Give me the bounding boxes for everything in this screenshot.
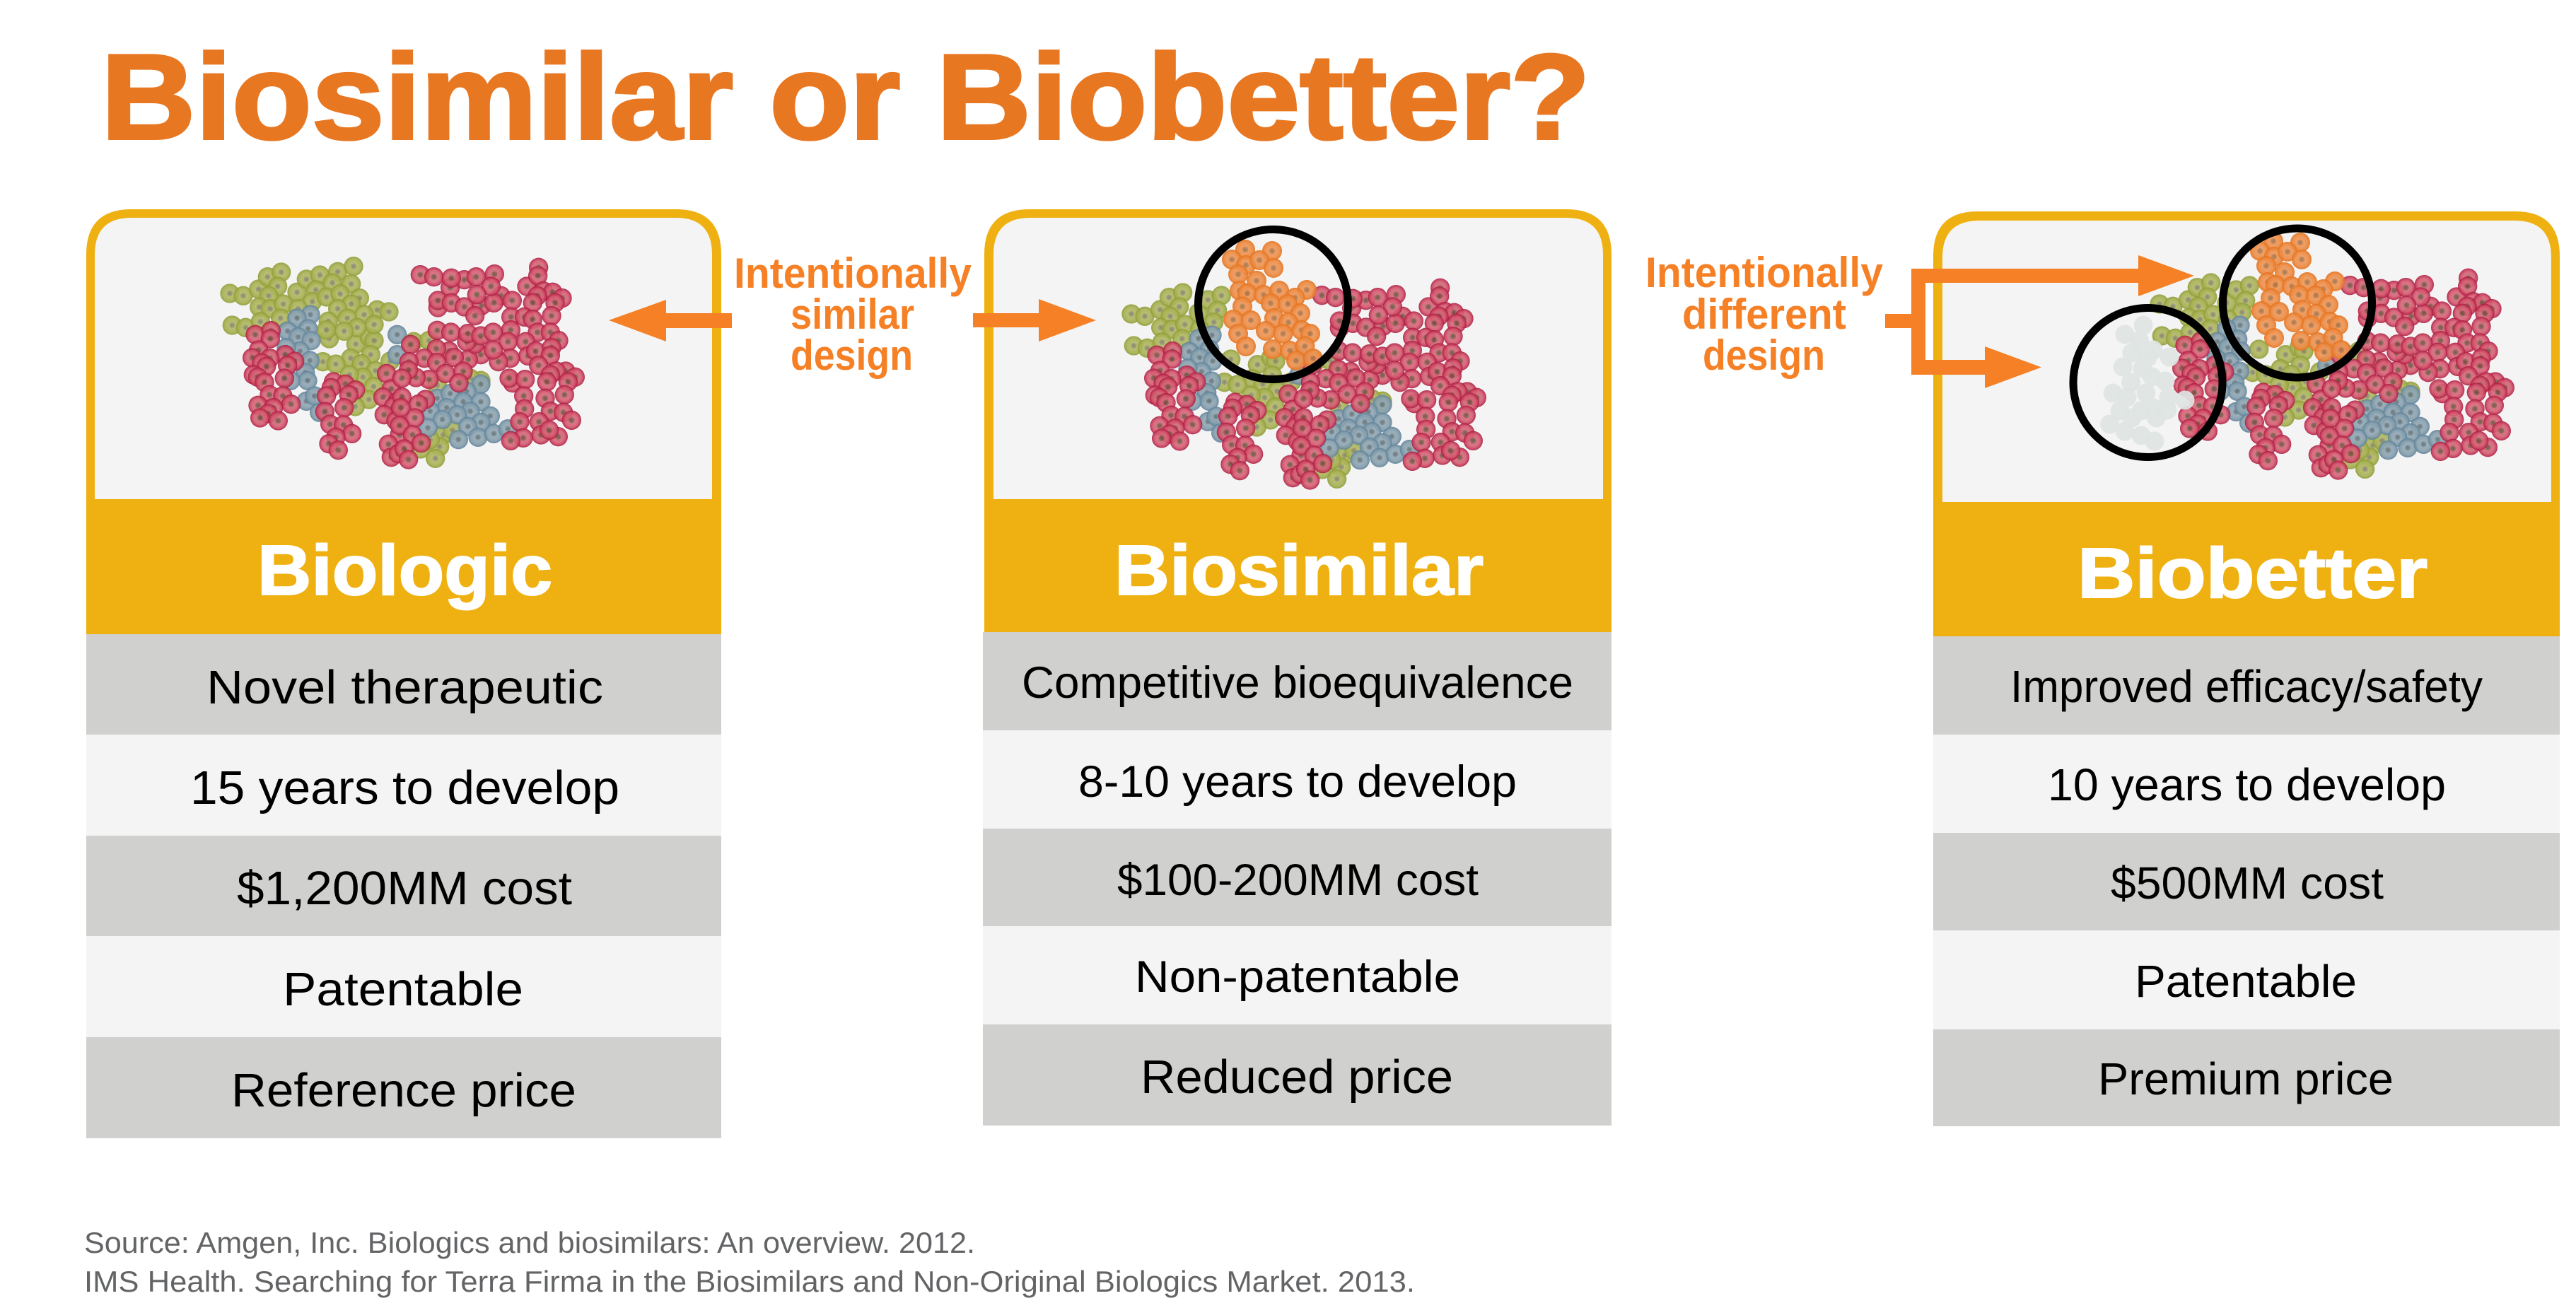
callout: intentionally different design: Intentionally — [1645, 249, 1884, 296]
callout: intentionally different design: design — [1703, 332, 1825, 379]
molecule area — [95, 218, 712, 499]
panel frame — [1933, 211, 2560, 636]
callout: intentionally similar design: design — [791, 332, 913, 379]
row: Competitive bioequivalence: Competitive bioequivalence — [1022, 658, 1573, 708]
row: Non-patentable — [983, 926, 1612, 1024]
heading: Biologic: Biologic — [257, 531, 552, 610]
row: $500MM cost: $500MM cost — [2111, 858, 2384, 908]
row: $100-200MM cost: $100-200MM cost — [1117, 855, 1479, 905]
row: Novel therapeutic — [86, 634, 721, 735]
row: 15 years to develop: 15 years to develop — [190, 761, 619, 814]
icon: highlight circle lower — [2073, 308, 2222, 457]
source note: Source: Amgen, Inc. Biologics and biosimilars: An overview. 2012. — [84, 1226, 975, 1259]
callout: intentionally different design: different — [1682, 291, 1846, 338]
molecule area — [993, 218, 1603, 499]
row: Non-patentable: Non-patentable — [1135, 952, 1460, 1002]
source note: IMS Health. Searching for Terra Firma in the Biosimilars and Non-Original Biologics Market. 2013. — [84, 1265, 1415, 1298]
row: Novel therapeutic: Novel therapeutic — [206, 661, 603, 714]
row: Improved efficacy/safety: Improved efficacy/safety — [2010, 661, 2483, 712]
source note — [84, 1226, 1415, 1298]
icon: biosimilar protein molecule — [1121, 240, 1486, 490]
panel: Biologic — [86, 209, 721, 1138]
icon: biobetter protein molecule — [2150, 231, 2514, 480]
heading: Biosimilar: Biosimilar — [1114, 531, 1484, 610]
row: Premium price: Premium price — [2098, 1053, 2394, 1104]
icon: added pale cluster — [2100, 315, 2195, 451]
arrow: different design forked — [1885, 255, 2194, 388]
panel: Biobetter — [1933, 211, 2560, 1126]
row: Patentable: Patentable — [283, 963, 523, 1016]
arrow: similar design right — [973, 299, 1096, 341]
row: $100-200MM cost — [983, 829, 1612, 926]
row: 8-10 years to develop — [983, 730, 1612, 829]
row: Premium price — [1933, 1029, 2560, 1126]
row: $1,200MM cost — [86, 836, 721, 936]
row: 10 years to develop: 10 years to develop — [2048, 759, 2446, 810]
icon: highlight circle upper — [2223, 228, 2372, 378]
panel frame — [984, 209, 1612, 632]
callout: intentionally similar design — [734, 250, 972, 379]
row: Patentable: Patentable — [2135, 956, 2357, 1007]
callout: intentionally similar design: similar — [791, 291, 914, 338]
callout: intentionally different design — [1645, 249, 1884, 379]
row: $500MM cost — [1933, 833, 2560, 930]
icon: reference protein molecule — [220, 257, 585, 469]
row: Patentable — [86, 936, 721, 1037]
row: 15 years to develop — [86, 735, 721, 836]
title: Biosimilar or Biobetter? — [101, 30, 1590, 165]
row: Reduced price — [983, 1024, 1612, 1126]
row: Improved efficacy/safety — [1933, 636, 2560, 735]
panel frame — [86, 209, 721, 634]
arrow: similar design left — [609, 300, 732, 341]
row: 8-10 years to develop: 8-10 years to develop — [1078, 757, 1517, 807]
row: Reduced price: Reduced price — [1141, 1051, 1453, 1104]
molecule area — [1942, 221, 2551, 502]
icon: highlight circle — [1198, 229, 1348, 379]
row: Reference price — [86, 1037, 721, 1138]
panel: Biosimilar — [983, 209, 1612, 1126]
row: Competitive bioequivalence — [983, 632, 1612, 730]
row: 10 years to develop — [1933, 735, 2560, 833]
heading: Biobetter: Biobetter — [2077, 534, 2428, 613]
row: Patentable — [1933, 930, 2560, 1029]
callout: intentionally similar design: Intentionally — [734, 250, 972, 297]
row: Reference price: Reference price — [231, 1064, 576, 1117]
row: $1,200MM cost: $1,200MM cost — [237, 862, 572, 915]
